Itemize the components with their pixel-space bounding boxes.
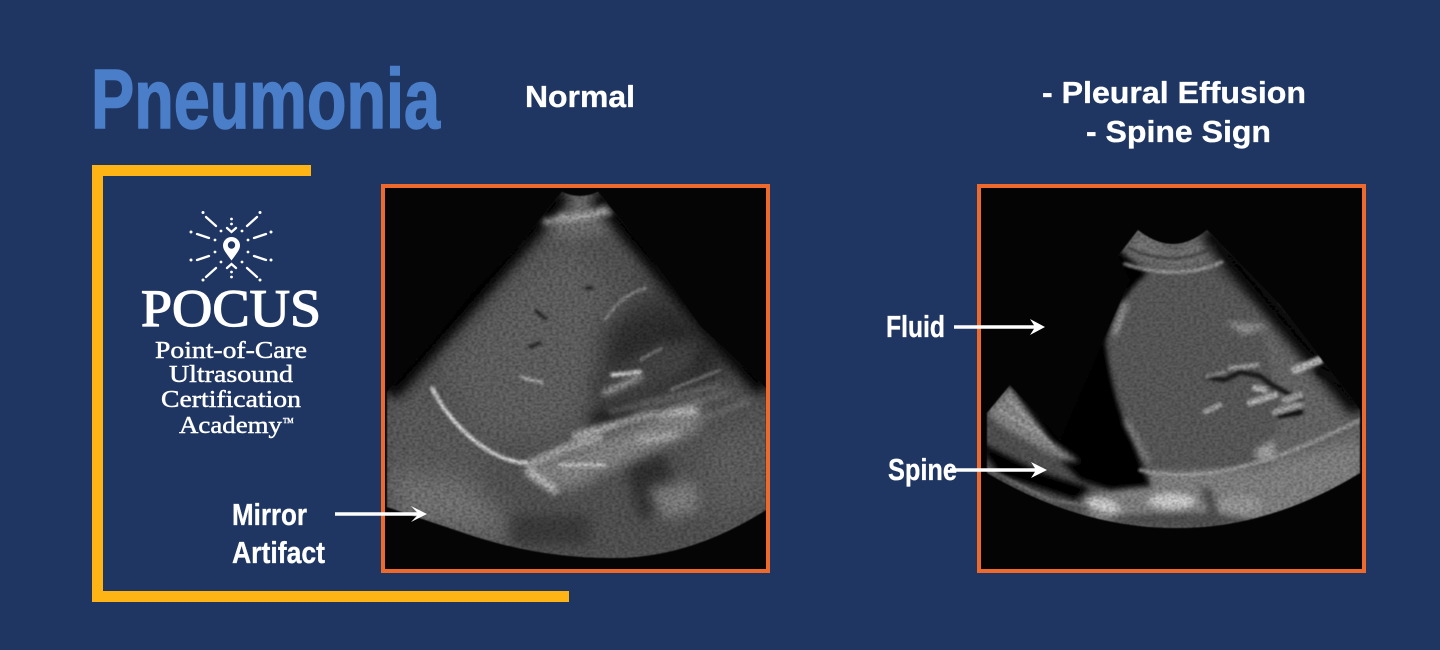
logo tagline: Academy [179, 413, 282, 439]
heading: normal: Normal [525, 79, 635, 114]
logo tagline [155, 338, 307, 439]
arrow: fluid [954, 319, 1045, 335]
lower dark gap above spine strip [975, 440, 1090, 500]
heading: pleural effusion and spine sign [1042, 75, 1306, 149]
ultrasound sector: effusion [986, 230, 1361, 528]
pleural fluid [1008, 250, 1154, 494]
label: spine: Spine [888, 452, 957, 487]
logo tagline: TM [283, 417, 294, 425]
logo tagline: Ultrasound [169, 362, 293, 388]
arrow: mirror artifact [335, 506, 427, 522]
heading: pleural effusion and spine sign: - Spine Sign [1086, 114, 1271, 149]
label: mirror artifact [232, 497, 325, 570]
frame: effusion image border [979, 186, 1364, 571]
logo tagline: Point-of-Care [155, 338, 307, 364]
label: mirror artifact: Artifact [232, 535, 325, 570]
heading: pleural effusion and spine sign: - Pleural Effusion [1042, 75, 1306, 110]
logo: POCUS academy [141, 211, 321, 439]
yellow frame [98, 170, 569, 596]
frame: normal image border [383, 186, 768, 571]
label: fluid: Fluid [886, 309, 945, 344]
panel: normal ultrasound image [381, 184, 770, 573]
sector edge fade [1207, 230, 1360, 410]
arrow: spine [950, 462, 1047, 478]
title: Pneumonia [91, 52, 441, 146]
logo tagline: Certification [161, 387, 301, 413]
panel: pleural effusion ultrasound image [975, 184, 1370, 573]
logo wordmark: POCUS [141, 280, 321, 338]
ultrasound sector: normal [381, 184, 770, 573]
label: mirror artifact: Mirror [232, 497, 307, 532]
icon: location pin with rays [190, 211, 272, 282]
sector edge fade [387, 192, 766, 392]
